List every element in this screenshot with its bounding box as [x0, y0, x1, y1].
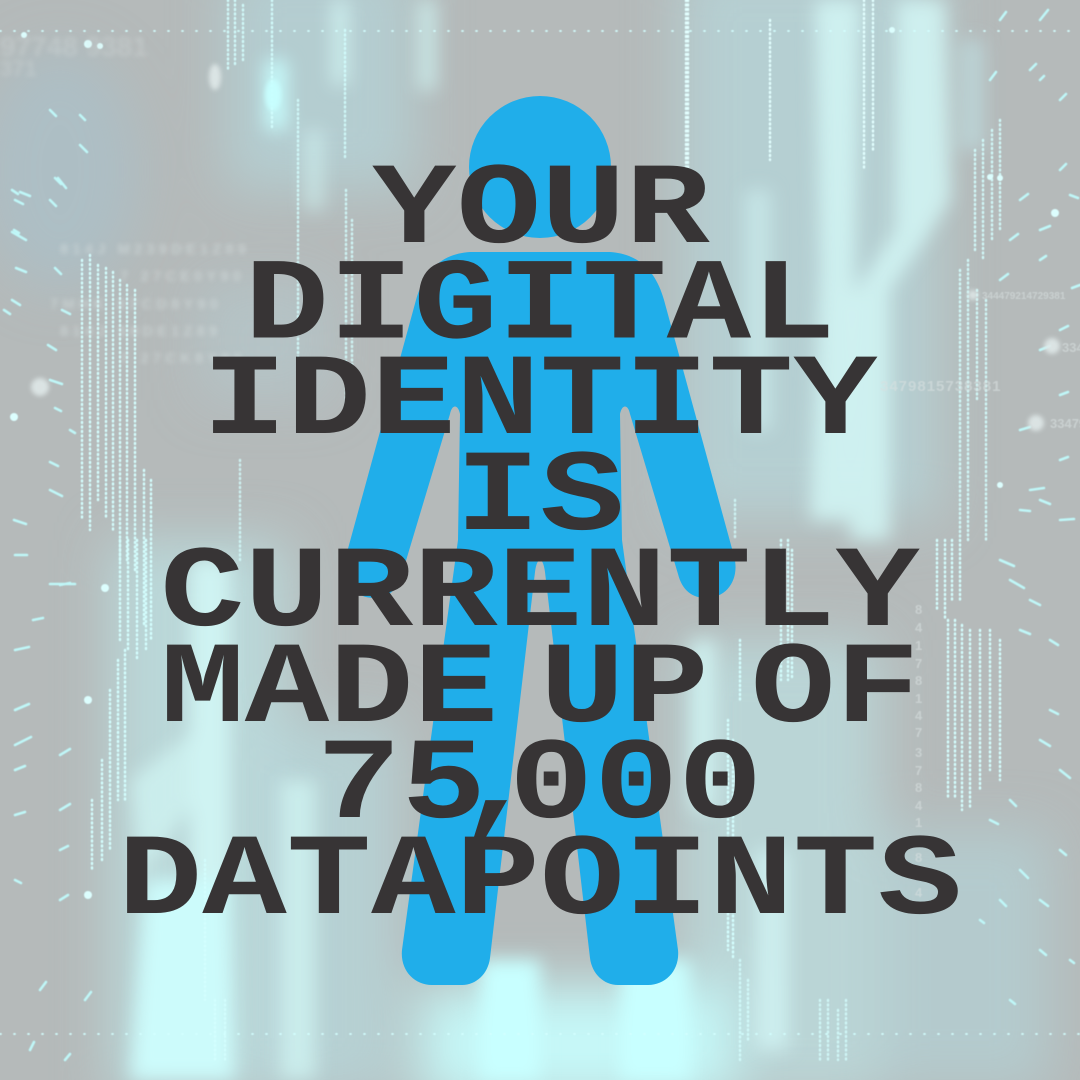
background: blurred data-stream photo: 4 — [915, 798, 923, 813]
figure body — [344, 252, 736, 985]
icon: blue human figure — [344, 96, 736, 985]
background: blurred data-stream photo: 1 — [915, 691, 922, 706]
title line 6: MADE UP OF — [160, 625, 920, 756]
background: blurred data-stream photo: 344479214729381 — [982, 291, 1066, 302]
bright vertical light streaks — [130, 0, 984, 1080]
background: blurred data-stream photo: 1 — [915, 638, 922, 653]
background: blurred data-stream photo: 3479815738381 — [880, 378, 1001, 395]
background: blurred data-stream photo: 7 — [915, 763, 922, 778]
background: blurred data-stream photo: 7 27CK8Y90 — [120, 350, 246, 367]
background: blurred data-stream photo: 7 27CE0Y90 — [120, 268, 245, 285]
background: blurred data-stream photo: 4 — [915, 708, 923, 723]
background: blurred data-stream photo: 7MHK 37CD8Y90 — [50, 296, 222, 313]
background: blurred data-stream photo: 97748 9381 — [0, 31, 148, 62]
background: blurred data-stream photo: 7 — [915, 656, 922, 671]
title line 4: IS — [456, 433, 624, 564]
background: blurred data-stream photo: 4 — [915, 620, 923, 635]
background: blurred data-stream photo: 4 — [915, 885, 923, 900]
title line 3: IDENTITY — [202, 337, 878, 468]
title line 8: DATAPOINTS — [118, 817, 962, 948]
title line 5: CURRENTLY — [160, 529, 921, 660]
figure head — [469, 96, 611, 238]
title line 2: DIGITAL — [244, 241, 836, 373]
background: blurred data-stream photo: 371 — [0, 56, 37, 81]
title: your digital identity is currently made up of 75,000 datapoints — [118, 146, 962, 948]
background: blurred data-stream photo: 1 — [915, 815, 922, 830]
background: blurred data-stream photo: 814J M239DE1Z89 — [60, 241, 250, 258]
background: blurred data-stream photo: 3 — [915, 745, 922, 760]
background: blurred data-stream photo: 7 — [915, 725, 922, 740]
background: blurred data-stream photo: 8 — [915, 602, 922, 617]
title line 7: 75,000 — [317, 721, 763, 852]
background: blurred data-stream photo: 8 — [915, 673, 922, 688]
background: blurred data-stream photo: 814J 39DE1Z89 — [60, 323, 221, 340]
background: blurred data-stream photo: 8 — [915, 850, 922, 865]
title line 1: YOUR — [372, 146, 711, 277]
background: blurred data-stream photo: 8 — [915, 780, 922, 795]
